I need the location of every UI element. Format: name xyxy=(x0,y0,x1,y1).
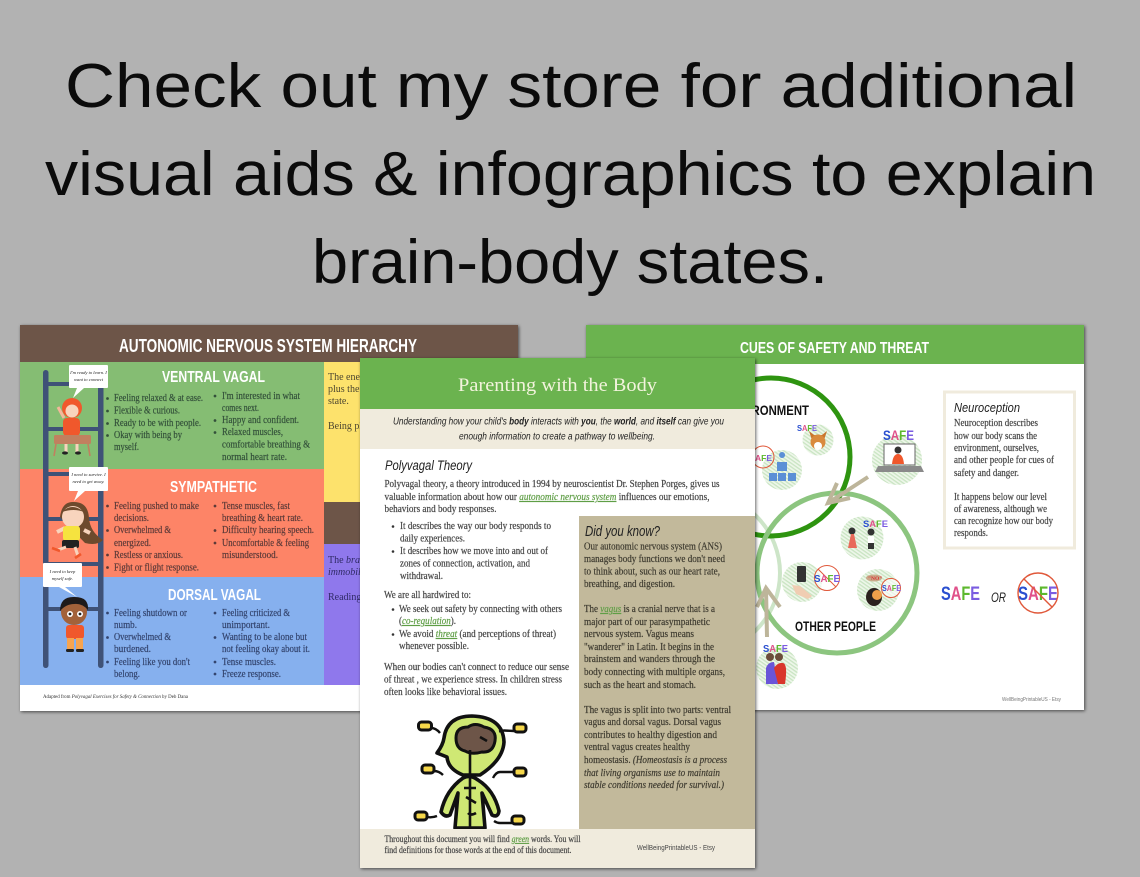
band: ventral vagal xyxy=(20,362,324,469)
panel: did you know: contributes to healthy digestion and xyxy=(584,730,717,741)
list: hardwired: We seek out safety by connecting with others xyxy=(399,604,562,615)
list: ventral vagal left: Okay with being by xyxy=(114,430,182,441)
panel: did you know: stable conditions needed for survival.) xyxy=(584,780,725,791)
list: describes: daily experiences. xyxy=(400,534,465,544)
panel: did you know: major part of our parasympathetic xyxy=(584,617,711,628)
list: dorsal vagal right: Tense muscles. xyxy=(222,657,276,668)
callout: neuroception: It happens below our level xyxy=(954,492,1047,503)
list: ventral vagal right: I'm interested in what xyxy=(222,391,300,402)
list: dorsal vagal right: Freeze response. xyxy=(222,669,281,680)
speech bubble: need to survive: need to get away. xyxy=(73,479,105,484)
paragraph: stress xyxy=(384,662,570,698)
callout: neuroception: environment, ourselves, xyxy=(954,443,1039,454)
list: describes: It describes the way our body responds to xyxy=(400,521,551,532)
speech bubble: ready to learn: want to connect xyxy=(74,377,104,382)
circle: self xyxy=(620,493,780,653)
icon: laptop safe xyxy=(872,428,924,485)
heading: cues: CUES OF SAFETY AND THREAT xyxy=(740,340,929,357)
list: dorsal vagal left: belong. xyxy=(114,669,140,680)
list: describes: withdrawal. xyxy=(400,571,443,582)
heading: parenting with the body: Parenting with the Body xyxy=(458,375,658,396)
side column: purple xyxy=(324,544,518,685)
list: hardwired xyxy=(384,590,562,652)
icon: hug safe: SAFE xyxy=(763,644,788,655)
icon: dog safe: SAFE xyxy=(797,423,817,433)
panel: did you know: homeostasis. (Homeostasis is a process xyxy=(584,755,727,766)
icon: girl told no: "NO" xyxy=(868,576,882,582)
credit: WellBeingPrintableUS - Etsy xyxy=(637,845,715,852)
list: sympathetic right: misunderstood. xyxy=(222,550,278,561)
speech bubble: need to survive xyxy=(69,467,108,501)
panel: did you know: The vagus is a cranial nerve that is a xyxy=(584,604,716,615)
list: hardwired: We avoid threat (and perceptions of threat) xyxy=(399,629,556,640)
side column: yellow: Being playful xyxy=(328,421,383,432)
heading: did you know: Did you know? xyxy=(585,524,661,540)
intro band xyxy=(360,409,755,449)
credit: WellBeingPrintableUS - Etsy xyxy=(1002,697,1061,703)
list: sympathetic left: Overwhelmed & xyxy=(114,525,171,536)
footer band xyxy=(360,829,755,868)
paragraph: stress: of threat , we experience stress. In children stress xyxy=(384,674,562,686)
list: sympathetic right: Uncomfortable & feeling xyxy=(222,538,309,549)
callout: neuroception xyxy=(944,392,1074,548)
heading: dorsal vagal: DORSAL VAGAL xyxy=(168,587,261,604)
footer band: find definitions for those words at the end of this document. xyxy=(384,845,572,855)
icon: hug safe xyxy=(756,644,798,689)
list: dorsal vagal left: burdened. xyxy=(114,644,151,655)
panel: did you know: manages body functions we don't need xyxy=(584,554,725,565)
band: sympathetic xyxy=(20,469,324,577)
paragraph: stress: When our bodies can't connect to reduce our sense xyxy=(384,662,570,673)
list: dorsal vagal left: Feeling shutdown or xyxy=(114,608,188,619)
labels on body xyxy=(415,722,526,824)
callout: neuroception: and other people for cues of xyxy=(954,455,1055,466)
speech bubble: need to survive: I need to survive. I xyxy=(70,472,106,477)
paragraph: polyvagal: Polyvagal theory, a theory introduced in 1994 by neuroscientist Dr. Stephen Porges, gives us xyxy=(384,479,720,490)
list: sympathetic right: Difficulty hearing speech. xyxy=(222,525,314,536)
side column: purple: immobilization xyxy=(328,567,388,578)
title xyxy=(45,52,1096,297)
panel: did you know: vagus and dorsal vagus. Dorsal vagus xyxy=(584,717,721,728)
icon: girl at desk xyxy=(54,398,91,456)
list: dorsal vagal right: unimportant. xyxy=(222,620,270,631)
paragraph: stress: often looks like behavioral issues. xyxy=(384,687,507,698)
list: ventral vagal right: Happy and confident. xyxy=(222,415,299,426)
list: sympathetic left: energized. xyxy=(114,538,151,549)
list: dorsal vagal right: not feeling okay about it. xyxy=(222,644,310,655)
list: ventral vagal left: myself. xyxy=(114,442,139,453)
list: sympathetic right: Tense muscles, fast xyxy=(222,501,290,512)
side column: yellow: plus the safety of this state xyxy=(328,384,435,395)
panel: did you know: nervous system. Vagus means xyxy=(584,629,694,640)
icon: crowd not safe: AFE xyxy=(755,453,772,463)
panel: autonomic nervous system hierarchy xyxy=(20,325,518,711)
list: ventral vagal right: Relaxed muscles, xyxy=(222,427,283,438)
list: ventral vagal left: Ready to be with people. xyxy=(114,418,201,429)
icon: phone not safe xyxy=(782,562,840,602)
list: ventral vagal left: Feeling relaxed & at ease. xyxy=(114,393,203,404)
heading: sympathetic: SYMPATHETIC xyxy=(170,479,257,496)
intro band: Understanding how your child's body interacts with you, the world, and itself can give you xyxy=(393,416,724,428)
circle: other people xyxy=(757,493,917,653)
title: Check out my store for additional xyxy=(65,52,1077,121)
list: dorsal vagal right: Wanting to be alone but xyxy=(222,632,307,643)
callout: neuroception: can recognize how our body xyxy=(954,516,1053,527)
icon: children safe xyxy=(840,516,888,560)
intro band: enough information to create a pathway to wellbeing. xyxy=(459,432,655,442)
list: hardwired: We are all hardwired to: xyxy=(384,590,471,601)
side column: brown xyxy=(324,502,518,544)
list: ventral vagal left: Flexible & curious. xyxy=(114,406,180,416)
list: sympathetic left: decisions. xyxy=(114,513,149,524)
list: sympathetic left: Feeling pushed to make xyxy=(114,501,199,512)
list: describes xyxy=(392,521,551,582)
callout: neuroception: of awareness, although we xyxy=(954,504,1047,515)
circle: other people: OTHER PEOPLE xyxy=(795,618,876,634)
icon: crowd not safe xyxy=(752,446,802,490)
list: ventral vagal right: comfortable breathing & xyxy=(222,440,310,450)
list: dorsal vagal left: Overwhelmed & xyxy=(114,632,171,643)
panel: did you know: "wanderer" in Latin. It begins in the xyxy=(584,642,714,653)
panel: did you know: Our autonomic nervous system (ANS) xyxy=(584,542,722,552)
arrow: self up xyxy=(757,588,780,637)
panel: did you know: breathing, and digestion. xyxy=(584,579,675,590)
list: ventral vagal right: normal heart rate. xyxy=(222,452,287,463)
footer band: Throughout this document you will find green words. You will xyxy=(384,834,581,844)
list: describes: zones of connection, activation, and xyxy=(400,558,530,570)
list: sympathetic right xyxy=(214,501,314,561)
callout: neuroception: responds. xyxy=(954,528,988,539)
legend: safe or not safe: OR xyxy=(991,589,1006,605)
circle: environment: ENVIRONMENT xyxy=(725,402,809,418)
legend: safe or not safe: SAFE xyxy=(1018,584,1058,605)
icon: arms-crossed boy xyxy=(60,597,88,652)
paragraph: polyvagal: behaviors and body responses. xyxy=(384,504,496,515)
panel: did you know: such as the heart and stomach. xyxy=(584,680,696,691)
list: dorsal vagal left xyxy=(106,608,190,680)
side column: yellow: state. xyxy=(328,396,349,407)
list: sympathetic left: Restless or anxious. xyxy=(114,550,183,561)
panel: cues of safety and threat xyxy=(586,325,1084,710)
icon: dog safe xyxy=(797,423,834,456)
list: sympathetic left xyxy=(106,501,199,574)
list: ventral vagal right xyxy=(214,391,310,463)
speech bubble: keep myself safe: myself safe. xyxy=(52,576,73,581)
heading: ventral vagal: VENTRAL VAGAL xyxy=(162,369,265,386)
title: brain-body states. xyxy=(312,228,828,297)
icon: girl told no xyxy=(857,569,902,611)
list: ventral vagal left xyxy=(106,393,203,453)
list: hardwired: (co-regulation). xyxy=(399,616,456,627)
panel: did you know: The vagus is split into two parts: ventral xyxy=(584,705,731,716)
list: dorsal vagal right xyxy=(214,608,310,680)
list: sympathetic left: Fight or flight response. xyxy=(114,562,199,574)
title: visual aids & infographics to explain xyxy=(45,140,1096,209)
speech bubble: ready to learn: I'm ready to learn. I xyxy=(69,370,107,375)
side column: yellow xyxy=(324,362,518,502)
heading: polyvagal theory: Polyvagal Theory xyxy=(385,458,473,473)
side column: purple: Reading, xyxy=(328,592,364,603)
panel: did you know xyxy=(579,516,755,829)
paragraph: polyvagal: valuable information about how our autonomic nervous system influences our emotions, xyxy=(384,492,710,503)
ladder xyxy=(43,370,104,668)
circle: environment xyxy=(692,378,850,536)
list: ventral vagal right: comes next. xyxy=(222,403,259,414)
arrow: environment to other people xyxy=(828,477,868,503)
heading: hierarchy: AUTONOMIC NERVOUS SYSTEM HIERARCHY xyxy=(119,336,417,356)
side column: purple: The brakes with xyxy=(328,555,392,566)
list: dorsal vagal left: Feeling like you don't xyxy=(114,657,190,668)
list: dorsal vagal right: Feeling criticized & xyxy=(222,608,290,619)
panel: parenting with the body xyxy=(360,358,755,868)
list: dorsal vagal left: numb. xyxy=(114,620,137,631)
callout: neuroception: safety and danger. xyxy=(954,468,1019,479)
icon: phone not safe: SAFE xyxy=(814,573,840,585)
callout: neuroception: Neuroception describes xyxy=(954,418,1038,429)
speech bubble: ready to learn xyxy=(69,365,108,398)
icon: girl told no: SAFE xyxy=(882,584,902,593)
panel: did you know: that living organisms use to maintain xyxy=(584,768,720,779)
icon: children safe: SAFE xyxy=(863,519,888,530)
side column: yellow: The energy of ventral vagal xyxy=(328,372,439,383)
callout: neuroception: how our body scans the xyxy=(954,431,1037,442)
panel: did you know: to think about, such as our heart rate, xyxy=(584,566,720,578)
list: describes: It describes how we move into and out of xyxy=(400,546,549,557)
icon: upset girl xyxy=(52,502,103,558)
paragraph: polyvagal xyxy=(384,479,720,515)
legend: safe or not safe xyxy=(941,573,1058,613)
list: sympathetic right: breathing & heart rate. xyxy=(222,513,303,524)
list: hardwired: whenever possible. xyxy=(399,641,469,652)
speech bubble: keep myself safe: I need to keep xyxy=(49,569,76,574)
source note: Adapted from Polyvagal Exercises for Safety & Connection by Deb Dana xyxy=(43,693,188,700)
panel: did you know: ventral vagus creates healthy xyxy=(584,742,690,753)
heading: neuroception: Neuroception xyxy=(954,400,1020,415)
icon: nervous system body xyxy=(415,716,526,828)
band: dorsal vagal xyxy=(20,577,324,685)
icon: laptop safe: SAFE xyxy=(883,428,914,443)
speech bubble: keep myself safe xyxy=(43,563,82,597)
legend: safe or not safe: SAFE xyxy=(941,584,980,605)
panel: did you know: brainstem and wanders through the xyxy=(584,654,716,665)
panel: did you know: body connecting with multiple organs, xyxy=(584,667,725,678)
